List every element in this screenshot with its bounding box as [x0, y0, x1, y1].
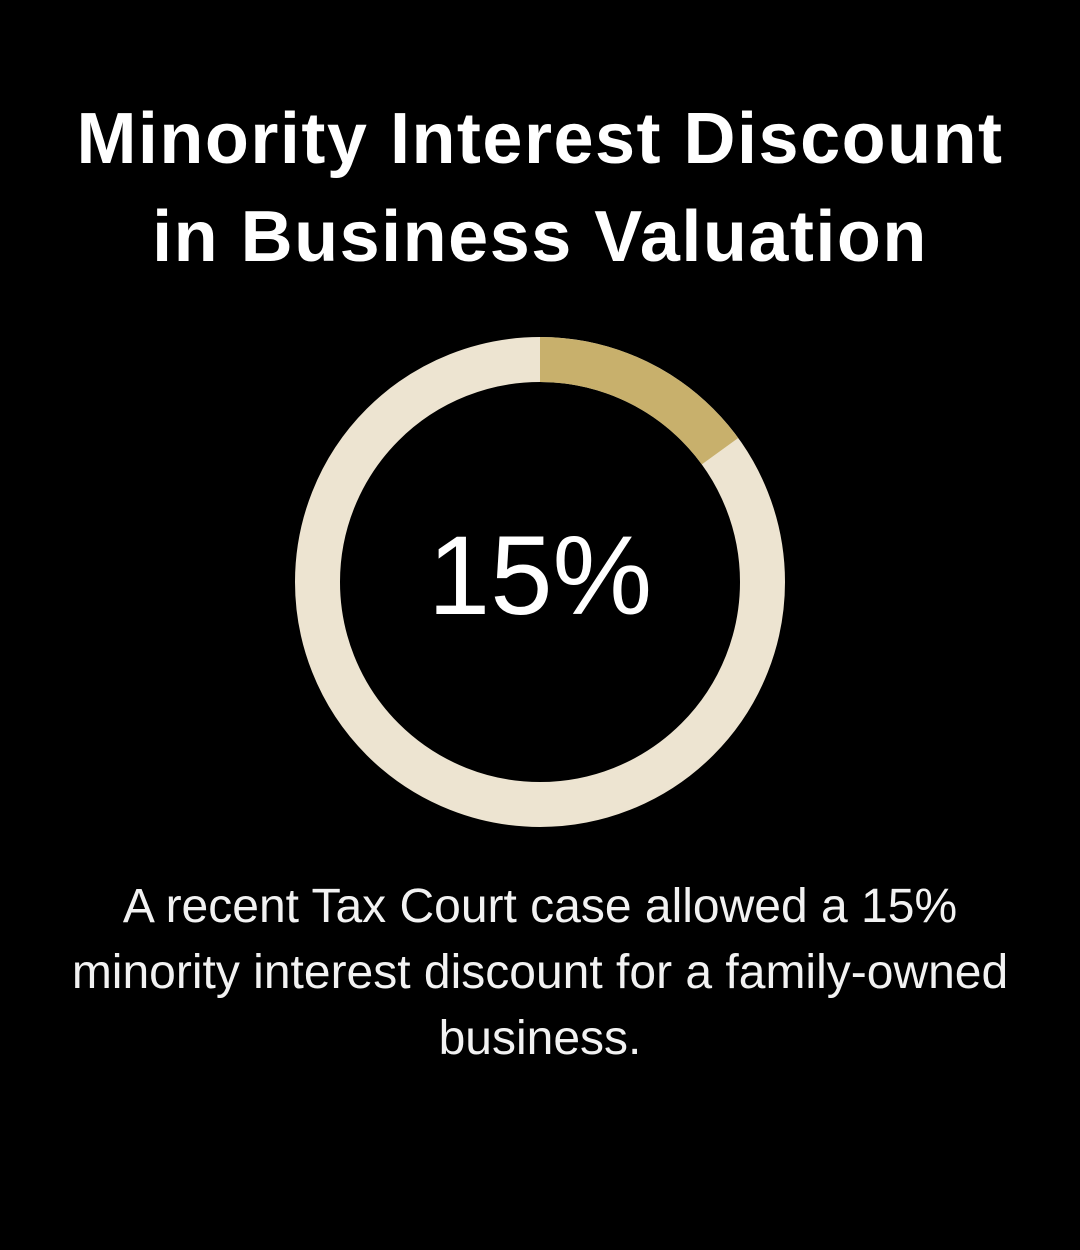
donut ring background — [318, 360, 762, 804]
donut segment 15% — [540, 337, 738, 464]
center value: 15% — [428, 513, 652, 638]
donut chart — [295, 337, 785, 827]
description text: minority interest discount for a family-owned — [72, 946, 1008, 999]
title: in Business Valuation — [152, 197, 928, 277]
description text — [72, 880, 1008, 1065]
description text: business. — [439, 1012, 641, 1065]
title: Minority Interest Discount — [76, 99, 1004, 179]
title — [76, 99, 1004, 277]
description text: A recent Tax Court case allowed a 15% — [123, 880, 957, 933]
